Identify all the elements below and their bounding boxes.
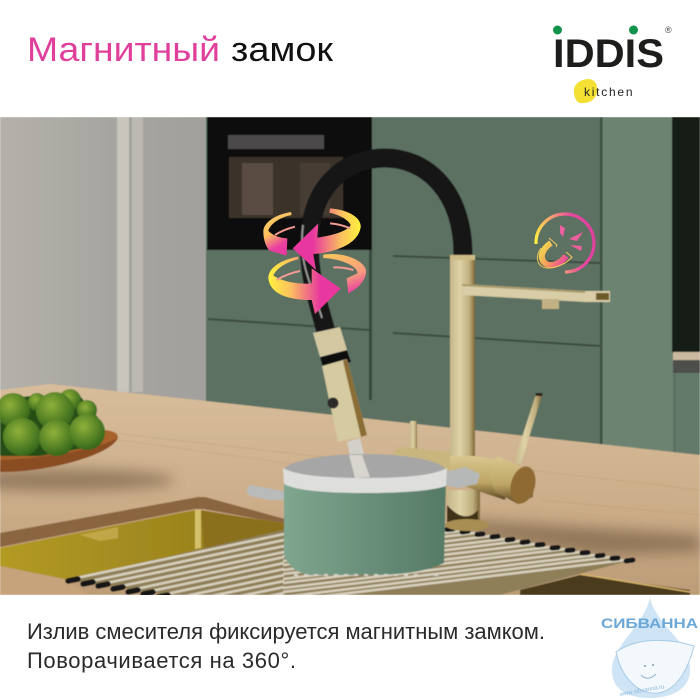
title: замок [231,31,334,69]
oven [207,117,372,250]
logo: iddis kitchen: IDDIS [553,32,664,76]
wall pilaster [117,117,144,392]
watermark: sibvanna: СИБВАННА [601,616,698,631]
faucet spout arm [462,284,610,309]
lower arrow left [268,257,341,314]
upper arrow right [293,208,361,270]
pot [246,454,480,575]
logo: iddis kitchen: kitchen [584,85,634,99]
title: Магнитный [27,31,220,69]
shadow under bowl [0,469,175,491]
water stream [346,438,364,455]
gold sink [0,510,284,582]
dish rack [64,526,636,595]
wall [0,117,208,417]
green cabinets [206,117,700,463]
lower inner arcs [277,267,353,280]
sparks [560,225,583,251]
wood grain [117,433,238,448]
logo: iddis kitchen [553,25,672,103]
watermark: sibvanna: www.sibvanna.ru [618,684,665,698]
watermark: sibvanna [601,597,698,698]
caption: Поворачивается на 360°. [27,648,296,673]
bowl with limes [0,389,118,472]
faucet body [395,255,542,531]
logo: iddis kitchen: ® [665,25,672,35]
shadow behind faucet [470,520,700,555]
icon: rotation arrows [263,208,366,314]
pull-out spray head [313,327,367,442]
upper arrow left [263,212,292,256]
countertop [0,384,700,595]
title [27,31,334,69]
faucet black hose [309,158,463,332]
caption: Излив смесителя фиксируется магнитным замком. [27,619,545,644]
caption [27,619,545,673]
bottom-left counter [0,582,88,594]
photo: kitchen scene [0,117,700,607]
upper inner arcs [275,223,350,235]
magnet shape [542,243,566,265]
icon: magnet [536,214,594,272]
lower arrow right [323,254,366,293]
hose highlight [302,225,322,318]
sink lip [0,497,285,547]
